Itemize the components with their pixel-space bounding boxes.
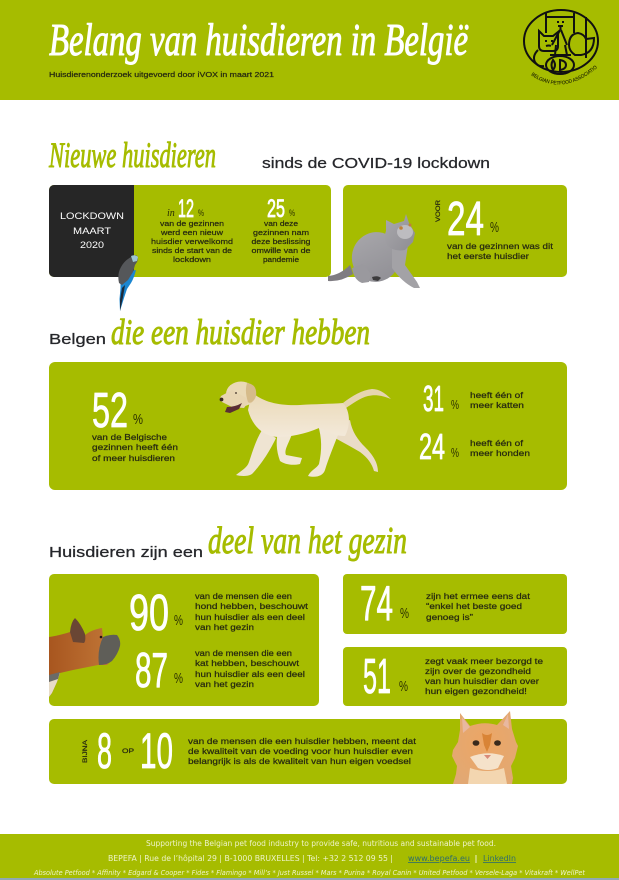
logo: Belgian Petfood Association — [523, 9, 599, 85]
footer contact line — [108, 853, 516, 863]
stat: 12 percent: huisdier verwelkomd — [151, 237, 233, 246]
stat: 24 percent dogs: 24 — [419, 426, 445, 467]
panel: part of the family — [49, 574, 319, 706]
stat: 52 percent: % — [133, 411, 143, 428]
stat: 12 percent: werd een nieuw — [160, 228, 224, 237]
stat: 52 percent: of meer huisdieren — [92, 454, 176, 463]
icon: ginger cat — [452, 711, 518, 784]
stat: 25 percent: omwille van de — [252, 246, 310, 255]
panel: more concerned: hun eigen gezondheid! — [425, 686, 527, 696]
stat: 25 percent: deze beslissing — [252, 237, 310, 246]
lockdown label: MAART — [73, 226, 111, 237]
panel: more concerned: % — [399, 678, 408, 695]
stat: 24 percent — [435, 193, 554, 261]
panel: more concerned: 51 — [363, 650, 391, 704]
icon: labrador puppy — [220, 382, 391, 477]
subtitle: Huisdierenonderzoek uitgevoerd door iVOX in maart 2021 — [49, 70, 274, 79]
panel: more concerned — [343, 647, 567, 706]
stat: 12 percent: sinds de start van de — [152, 246, 232, 255]
stat: 52 percent: gezinnen heeft één — [92, 443, 179, 452]
stat: 8 op 10: OP — [122, 748, 134, 755]
stat: 87 percent: van de mensen die een — [195, 648, 292, 658]
icon: boxer dog — [49, 618, 120, 697]
stat: 25 percent: pandemie — [263, 255, 299, 264]
title: Belang van huisdieren in België — [49, 15, 469, 65]
stat: 24 percent: van de gezinnen was dit — [447, 241, 554, 251]
lockdown label: LOCKDOWN — [60, 211, 124, 222]
stat: 24 percent dogs — [419, 426, 531, 467]
icon: grey cat — [328, 214, 420, 289]
stat: 31 percent cats: % — [451, 397, 459, 412]
stat: 87 percent: 87 — [135, 644, 168, 698]
stat: 24 percent: VOOR — [435, 200, 442, 222]
stat: 52 percent: 52 — [92, 384, 128, 438]
stat: 90 percent: van de mensen die een — [195, 591, 292, 601]
panel: only the best: genoeg is” — [426, 612, 473, 622]
stat: 8 op 10: 10 — [140, 723, 173, 779]
stat: 90 percent: % — [174, 612, 183, 629]
statement text: de kwaliteit van de voeding voor hun huisdier even — [188, 746, 413, 756]
heading: Nieuwe huisdieren: sinds de COVID-19 lockdown — [262, 155, 490, 172]
panel: only the best: % — [400, 605, 409, 622]
lockdown label: 2020 — [80, 240, 104, 251]
stat: 87 percent: hun huisdier als een deel — [195, 669, 305, 679]
panel: more concerned: van hun huisdier dan over — [425, 676, 539, 686]
stat: 87 percent: % — [174, 670, 183, 687]
panel: only the best: 74 — [360, 577, 393, 631]
stat: 90 percent: van het gezin — [195, 622, 254, 632]
panel: only the best: “enkel het beste goed — [426, 601, 522, 611]
footer brand list: Absolute Petfood * Affinity * Edgard & Cooper * Fides * Flamingo * Mill’s * Just Russel * Mars * Purina * Royal Canin * United Petfood * Versele-Laga * Vitakraft * WellPet — [33, 869, 585, 877]
stat: 90 percent — [129, 584, 309, 641]
stat: 24 percent dogs: meer honden — [470, 449, 531, 458]
stat: 25 percent: % — [289, 208, 295, 219]
stat: 90 percent: hond hebben, beschouwt — [195, 601, 309, 611]
panel: only the best: zijn het ermee eens dat — [426, 591, 531, 601]
statement text: van de mensen die een huisdier hebben, meent dat — [188, 736, 417, 746]
stat: 90 percent: 90 — [129, 584, 169, 641]
stat: 31 percent cats: heeft één of — [470, 391, 524, 400]
panel: first pet — [343, 185, 567, 277]
stat: 31 percent cats — [423, 378, 525, 419]
stat: 52 percent — [92, 384, 179, 463]
stat: 24 percent: het eerste huisdier — [447, 251, 529, 261]
stat: 24 percent dogs: % — [451, 445, 459, 460]
stat: 12 percent: lockdown — [173, 255, 211, 264]
stat: 12 percent: van de gezinnen — [160, 219, 224, 228]
stat: 8 op 10: BIJNA — [82, 739, 89, 763]
statement text: belangrijk is als de kwaliteit van hun eigen voedsel — [188, 756, 411, 766]
stat: 87 percent: kat hebben, beschouwt — [195, 658, 300, 668]
stat: 12 percent: % — [198, 208, 204, 219]
stat: 8 op 10 — [82, 723, 173, 779]
panel: only the best — [343, 574, 567, 634]
footer contact line: LinkedIn — [483, 854, 516, 863]
stat: 12 percent — [151, 195, 233, 264]
stat: 12 percent: in — [167, 208, 175, 219]
footer mission line: Supporting the Belgian pet food industry to provide safe, nutritious and sustainable pet food. — [146, 839, 496, 848]
stat: 24 percent: 24 — [447, 193, 484, 246]
stat: 52 percent: van de Belgische — [92, 433, 168, 442]
stat: 25 percent: 25 — [267, 195, 285, 223]
panel: lockdown — [49, 185, 331, 277]
stat: 87 percent — [135, 644, 305, 698]
header band — [0, 0, 619, 100]
stat: 87 percent: van het gezin — [195, 679, 254, 689]
panel: Belgians with pets — [49, 362, 567, 490]
stat: 25 percent: gezinnen nam — [253, 228, 309, 237]
footer contact line: www.bepefa.eu — [408, 854, 470, 863]
icon: budgerigar — [118, 255, 138, 311]
heading: Nieuwe huisdieren: Nieuwe huisdieren — [48, 135, 216, 175]
stat: 31 percent cats: 31 — [423, 378, 444, 419]
stat: 12 percent: 12 — [178, 195, 194, 223]
stat: 25 percent — [252, 195, 310, 264]
heading: Huisdieren zijn een deel van het gezin: Huisdieren zijn een — [49, 544, 203, 561]
stat: 24 percent: % — [490, 219, 499, 236]
heading: Belgen die een huisdier hebben — [49, 312, 370, 352]
stat: 24 percent dogs: heeft één of — [470, 439, 524, 448]
panel: more concerned: zegt vaak meer bezorgd te — [425, 656, 543, 666]
stat: 25 percent: van deze — [264, 219, 298, 228]
panel: more concerned: zijn over de gezondheid — [425, 666, 531, 676]
footer contact line: BEPEFA | Rue de l’hôpital 29 | B-1000 BRUXELLES | Tel: +32 2 512 09 55 | — [108, 853, 393, 863]
footer contact line: | — [474, 854, 478, 863]
heading: Huisdieren zijn een deel van het gezin: deel van het gezin — [208, 520, 407, 562]
heading: Belgen die een huisdier hebben: die een huisdier hebben — [111, 312, 370, 352]
heading: Huisdieren zijn een deel van het gezin — [49, 520, 407, 562]
stat: 31 percent cats: meer katten — [470, 401, 525, 410]
heading: Belgen die een huisdier hebben: Belgen — [49, 331, 106, 348]
panel: 8 out of 10 — [49, 711, 567, 784]
lockdown label — [60, 211, 124, 251]
stat: 90 percent: hun huisdier als een deel — [195, 612, 305, 622]
footer — [0, 834, 619, 880]
statement text — [188, 736, 417, 766]
heading: Nieuwe huisdieren — [48, 135, 490, 175]
stat: 8 op 10: 8 — [97, 723, 112, 779]
